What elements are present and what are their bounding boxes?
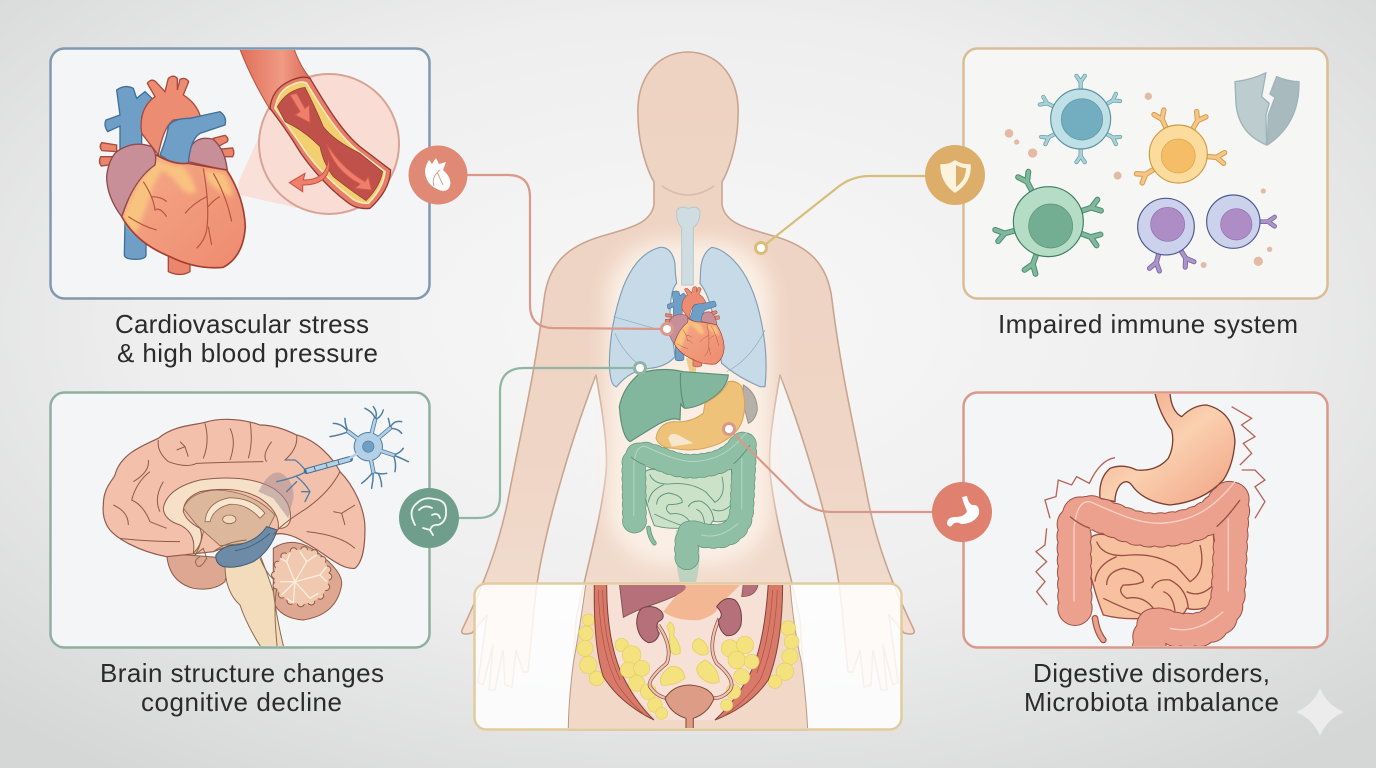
inner cavity	[607, 583, 768, 720]
muscle left	[594, 583, 654, 720]
kidneys	[637, 598, 741, 643]
right lung	[700, 247, 766, 387]
magnifier circle	[259, 74, 399, 214]
blue cell	[1040, 76, 1120, 162]
caption: cardiovascular: Cardiovascular stress	[115, 309, 369, 339]
shaded atrophy area	[258, 472, 293, 518]
caption: digestive: Digestive disorders,	[1033, 658, 1270, 688]
purple cell small	[1207, 195, 1275, 248]
caption: brain: cognitive decline	[141, 687, 342, 717]
lung fissures	[613, 317, 765, 372]
brainstem	[225, 555, 284, 648]
sparkle watermark	[1296, 688, 1344, 736]
caption: immune: Impaired immune system	[998, 309, 1298, 339]
dot: shoulder	[756, 242, 766, 254]
stomach	[656, 381, 745, 450]
fat deposits inner	[615, 636, 759, 719]
bladder	[665, 685, 714, 730]
connector: brain	[458, 368, 640, 518]
pain marks	[1036, 407, 1265, 605]
intestines	[1070, 482, 1240, 662]
intestines in body	[631, 432, 750, 582]
panel: digestive	[964, 392, 1328, 662]
narrowed lumen	[277, 87, 383, 201]
neuron	[277, 407, 408, 502]
descending aorta	[686, 358, 696, 373]
ureters	[650, 618, 732, 698]
fornix	[205, 498, 265, 522]
rectum	[676, 530, 700, 582]
connector end dots	[634, 242, 766, 434]
pituitary stalk	[195, 532, 247, 566]
hippocampus	[216, 527, 277, 567]
stomach	[1100, 393, 1235, 505]
thalamus	[183, 490, 275, 546]
green cell	[995, 172, 1101, 274]
caption: cardiovascular	[115, 309, 378, 368]
dot: heart	[662, 324, 672, 334]
orange cell	[1136, 110, 1225, 183]
floating particles	[1005, 93, 1272, 268]
cerebellum arbor	[274, 549, 329, 604]
liver	[619, 370, 728, 442]
caption: brain: Brain structure changes	[100, 658, 384, 688]
connector lines	[458, 175, 934, 518]
internal organs	[609, 207, 766, 450]
artery	[239, 47, 311, 109]
muscle fibres	[598, 590, 777, 717]
small heart in chest	[665, 287, 724, 367]
artery inner lining	[275, 82, 385, 203]
caption: digestive	[1024, 658, 1279, 717]
connector: heart	[466, 175, 667, 329]
panel: brain	[50, 392, 430, 648]
broken shield	[1235, 73, 1299, 145]
liver section	[619, 585, 686, 618]
panel: cardiovascular	[50, 47, 430, 298]
panel: immune system	[964, 48, 1328, 298]
abdomen skin	[568, 583, 808, 730]
caption: brain	[100, 658, 384, 717]
icon: stomach badge	[932, 482, 992, 542]
muscle right	[715, 583, 783, 720]
panel: pelvic cutaway	[474, 583, 902, 730]
magnifier cone	[238, 138, 299, 208]
purple cell	[1138, 198, 1194, 271]
icon: brain badge	[399, 488, 459, 548]
spleen	[743, 385, 757, 423]
icon: heart badge	[408, 146, 468, 204]
fat deposits outer	[577, 614, 799, 688]
connector: immune	[761, 176, 928, 248]
temporal lobe and cerebellum base	[167, 553, 230, 589]
cerebrum	[103, 419, 365, 568]
dot: liver	[634, 362, 646, 374]
gyri folds	[113, 422, 355, 548]
stomach section	[663, 583, 742, 620]
flow arrows	[290, 93, 310, 123]
corpus callosum	[163, 478, 290, 553]
spleen section	[742, 583, 758, 597]
caption: digestive: Microbiota imbalance	[1024, 687, 1279, 717]
human body silhouette	[462, 52, 914, 730]
trachea and thyroid	[677, 207, 700, 285]
left lung	[609, 247, 677, 387]
dot: stomach	[724, 424, 734, 434]
icon: shield badge	[925, 145, 985, 205]
duodenum gap	[668, 434, 693, 447]
artery section wall	[270, 77, 391, 209]
colon and small intestine	[631, 432, 750, 558]
caption: cardiovascular: & high blood pressure	[117, 338, 378, 368]
connector: gut	[729, 429, 934, 512]
liver lobe line	[680, 373, 684, 408]
heart illustration	[99, 76, 245, 274]
